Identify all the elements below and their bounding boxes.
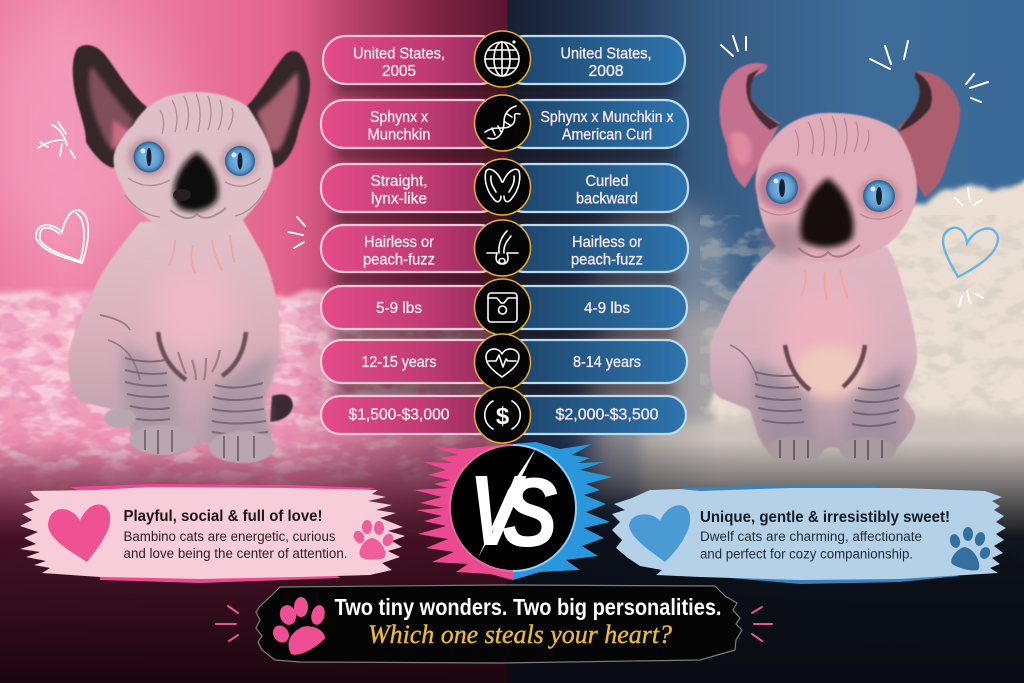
icon: heart rate xyxy=(474,334,530,390)
row: ears: lynx-like xyxy=(371,190,427,208)
panel: Dwelf personality xyxy=(612,485,1006,584)
row: weight: 4-9 lbs xyxy=(584,300,630,317)
face mask xyxy=(174,152,218,211)
row: ears: backward xyxy=(576,190,638,208)
background: pink side xyxy=(0,0,560,683)
toes xyxy=(780,440,882,460)
pink text xyxy=(124,508,348,561)
row: coat: peach-fuzz xyxy=(571,252,643,268)
row: origin xyxy=(323,36,685,84)
icon: dollar xyxy=(474,387,530,443)
row: origin: 2005 xyxy=(382,63,416,80)
head xyxy=(114,92,273,237)
left ear xyxy=(73,45,147,168)
front legs xyxy=(752,360,905,448)
row: weight: 5-9 lbs xyxy=(376,300,422,317)
panel: Bambino personality xyxy=(20,484,405,583)
VS badge xyxy=(414,442,612,580)
blue text: Unique, gentle & irresistibly sweet! xyxy=(700,509,950,526)
photo: Bambino kitten xyxy=(68,45,310,463)
blue text xyxy=(700,509,950,562)
VS lettering: V xyxy=(469,455,527,567)
background: blue side xyxy=(507,0,1024,536)
row: ears xyxy=(321,164,688,212)
eyes xyxy=(128,138,259,178)
row: breed mix: Sphynx x xyxy=(370,109,428,126)
row: coat: peach-fuzz xyxy=(363,252,435,268)
row: breed mix: Sphynx x Munchkin x xyxy=(540,109,674,126)
comparison table xyxy=(321,36,688,434)
body xyxy=(68,220,280,462)
wrinkles xyxy=(730,116,902,426)
pink splash xyxy=(414,444,513,580)
row: lifespan xyxy=(321,340,687,383)
row: origin: 2008 xyxy=(588,63,624,80)
row: ears: Straight, xyxy=(370,173,428,190)
tagline accent marks xyxy=(216,606,772,641)
row: breed mix: Munchkin xyxy=(368,126,430,144)
VS badge: S xyxy=(502,457,558,567)
blue text: and perfect for cozy companionship. xyxy=(700,546,913,562)
wrinkles xyxy=(100,94,268,434)
pink text: and love being the center of attention. xyxy=(124,546,348,561)
icon: ears xyxy=(474,159,530,215)
icon: banner paw xyxy=(270,597,327,655)
row: coat: Hairless or xyxy=(364,234,434,251)
row: ears: Curled xyxy=(586,173,628,190)
toes xyxy=(145,430,254,461)
icon: globe xyxy=(474,31,530,87)
icon: blue paw xyxy=(948,527,992,571)
tagline line two: Which one steals your heart? xyxy=(368,620,672,649)
body xyxy=(710,243,917,461)
doodle: left side sparkles and heart xyxy=(36,122,305,263)
row: origin: United States, xyxy=(353,46,445,62)
eyes xyxy=(758,166,900,215)
tagline line one: Two tiny wonders. Two big personalities. xyxy=(334,594,722,620)
front legs xyxy=(121,345,276,445)
row: lifespan: 12-15 years xyxy=(362,354,437,371)
row: coat: Hairless or xyxy=(572,234,642,251)
paws xyxy=(104,408,275,463)
row: price: $2,000-$3,500 xyxy=(556,406,659,424)
blue splash xyxy=(513,442,612,580)
row: lifespan: 8-14 years xyxy=(573,354,641,371)
icon: dna helix xyxy=(474,95,530,151)
icon: blue heart xyxy=(629,505,690,562)
photo: Dwelf kitten xyxy=(710,63,960,463)
icon: pink paw xyxy=(352,520,395,560)
row: coat xyxy=(321,225,688,272)
icon: weight scale xyxy=(474,279,530,335)
right curled ear xyxy=(898,71,960,197)
row: price: $1,500-$3,000 xyxy=(348,406,450,424)
row: price xyxy=(321,396,686,434)
left curled ear xyxy=(719,63,780,188)
blue text: Dwelf cats are charming, affectionate xyxy=(700,529,922,544)
icon: dollar: $ xyxy=(496,403,510,430)
icon: hair follicle xyxy=(474,220,530,276)
row: breed mix: American Curl xyxy=(562,126,652,144)
head xyxy=(755,113,917,262)
face mask xyxy=(800,178,854,247)
pink text: Bambino cats are energetic, curious xyxy=(124,529,336,544)
right ear xyxy=(246,51,310,168)
tagline banner xyxy=(256,585,742,663)
row: weight xyxy=(321,286,687,329)
row: breed mix xyxy=(321,100,688,148)
pink text: Playful, social & full of love! xyxy=(124,508,322,525)
row shadows xyxy=(335,80,675,394)
doodle: right side sparkles and heart xyxy=(721,36,998,306)
row: origin: United States, xyxy=(560,46,652,62)
paws xyxy=(767,436,896,463)
icon: pink heart xyxy=(48,505,110,562)
